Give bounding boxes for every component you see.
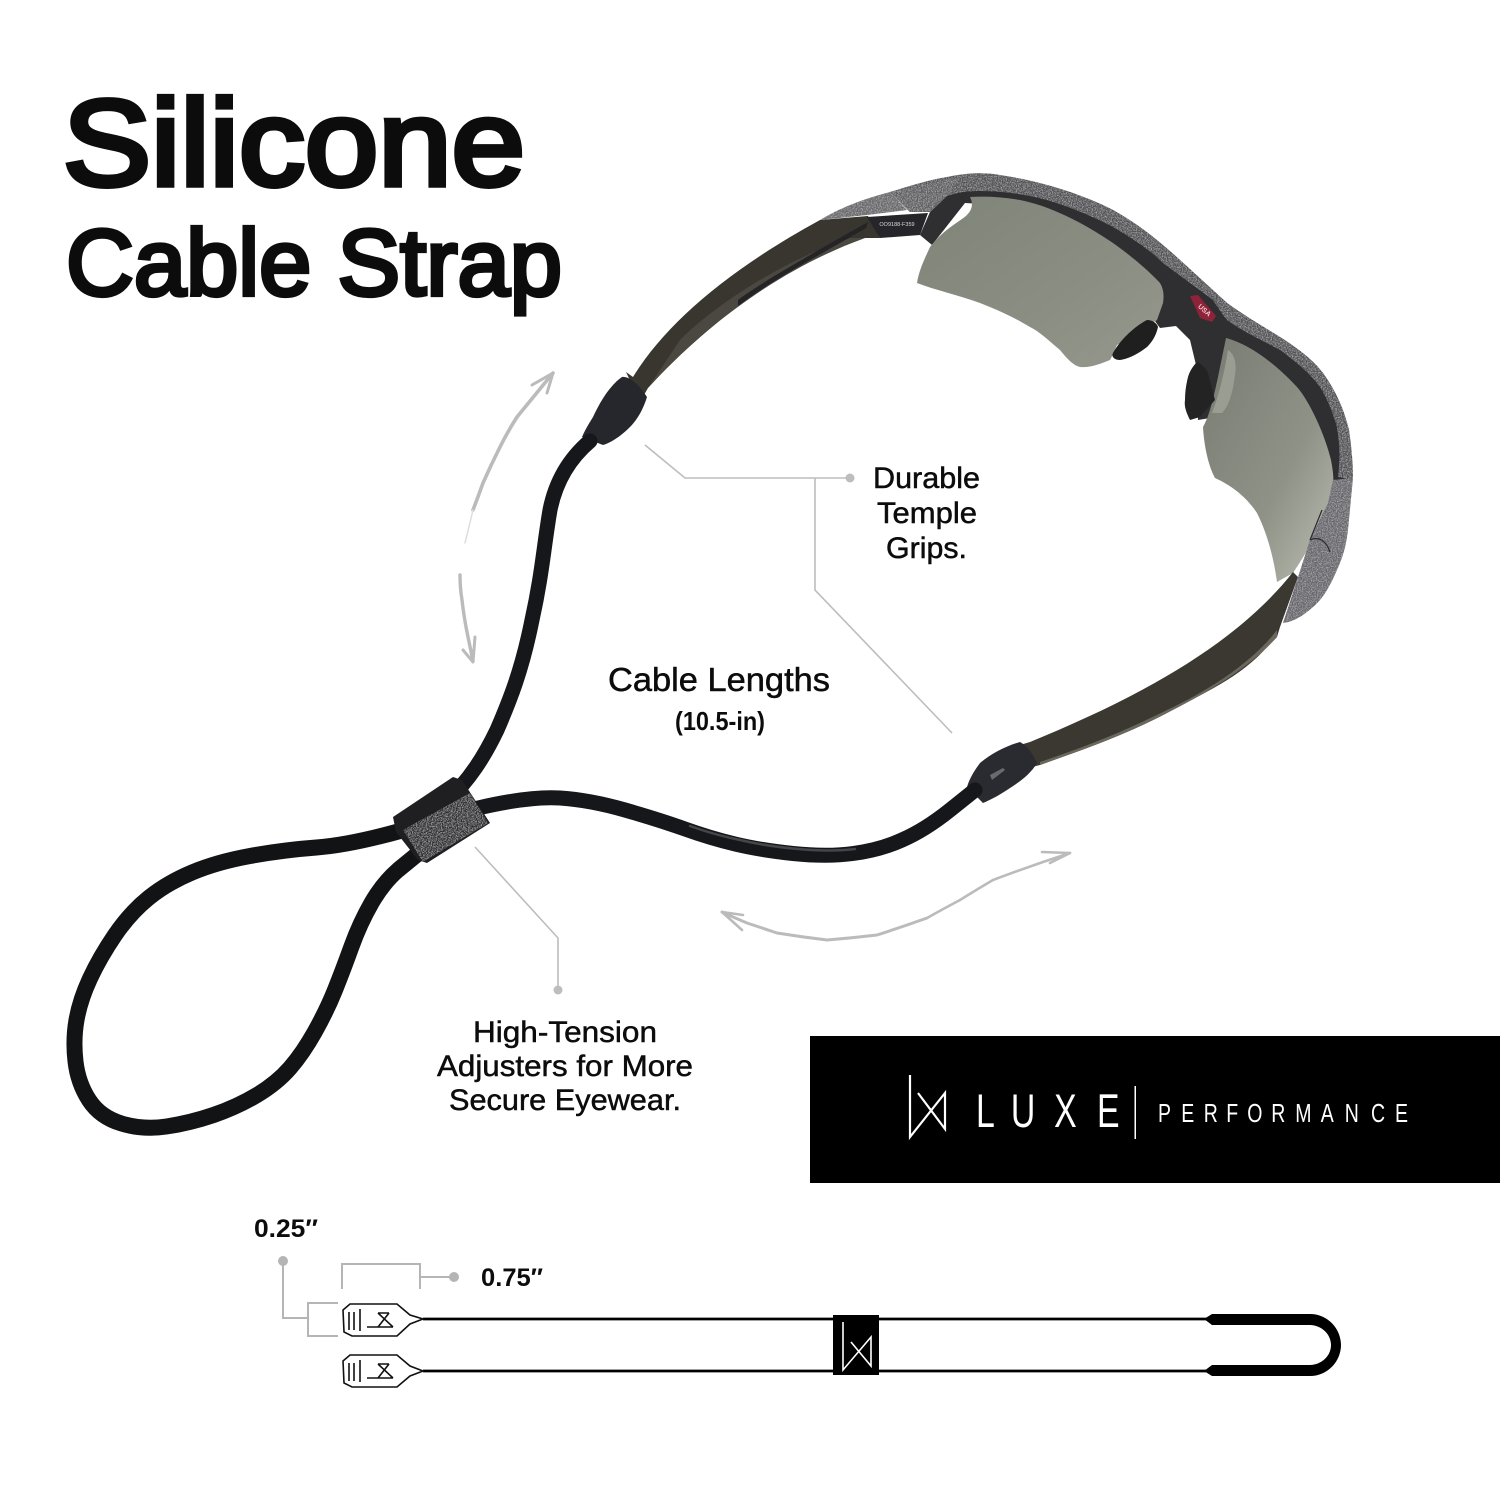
label: cable lengths <box>608 661 830 736</box>
label text <box>873 462 980 565</box>
cable strap <box>74 441 975 1128</box>
rubber end loop <box>1204 1314 1341 1376</box>
dimension label 0.25: 0.25″ <box>254 1215 318 1243</box>
connector tip bottom <box>343 1355 423 1387</box>
banner: luxe performance logo <box>810 1036 1500 1183</box>
label text <box>437 1016 693 1117</box>
adjuster <box>393 777 490 863</box>
leader lines <box>645 445 952 733</box>
callout: durable temple grips <box>645 445 980 733</box>
title: Cable Strap <box>66 210 562 315</box>
label text: Temple <box>877 497 977 530</box>
left hinge silver <box>890 177 960 212</box>
cable: adjustable loop <box>74 831 420 1128</box>
left lens <box>917 197 1164 367</box>
wordmark: LUXE <box>976 1085 1120 1137</box>
label text: Durable <box>873 462 980 495</box>
left temple grip <box>582 377 647 445</box>
cable: right temple to adjuster <box>478 790 975 855</box>
USA badge <box>1190 295 1216 322</box>
diagram: strap dimensions <box>254 1215 1341 1387</box>
title <box>63 75 562 315</box>
left temple arm <box>626 216 880 402</box>
sunglasses <box>582 173 1353 803</box>
title: Silicone <box>63 75 525 211</box>
label text: High-Tension <box>473 1016 657 1049</box>
nose pads <box>1112 320 1158 360</box>
dimension brackets <box>283 1261 454 1336</box>
temple markings: OO9188-F359 <box>879 222 915 228</box>
USA badge: USA <box>1196 303 1212 318</box>
callout: high-tension adjusters <box>437 847 693 1117</box>
dimension label 0.75: 0.75″ <box>481 1264 543 1292</box>
left temple tip silver <box>820 192 907 220</box>
right lens highlight <box>1212 350 1236 413</box>
right temple silver hinge <box>1283 478 1353 623</box>
frame dark body <box>920 178 1352 510</box>
left temple dark insert <box>867 213 928 238</box>
arrow: top left double arrow <box>460 373 553 662</box>
label text: Secure Eyewear. <box>449 1084 681 1117</box>
leader line <box>475 847 558 990</box>
frame silver brow <box>890 173 1353 480</box>
cable: left temple to adjuster <box>445 441 590 803</box>
slider logo block <box>833 1315 879 1375</box>
connector tip top <box>343 1304 423 1336</box>
arrow: bottom double arrow <box>722 852 1070 940</box>
banner: luxe performance logo: PERFORMANCE <box>1158 1098 1408 1128</box>
label: cable lengths: (10.5-in) <box>675 706 765 736</box>
strap lines <box>423 1319 1212 1371</box>
right temple arm <box>1020 572 1298 768</box>
logo mark <box>910 1075 945 1137</box>
right lens <box>1203 338 1333 582</box>
right temple grip <box>967 742 1037 803</box>
label text: Adjusters for More <box>437 1050 693 1083</box>
label: cable lengths: Cable Lengths <box>608 661 830 698</box>
label text: Grips. <box>886 532 967 565</box>
